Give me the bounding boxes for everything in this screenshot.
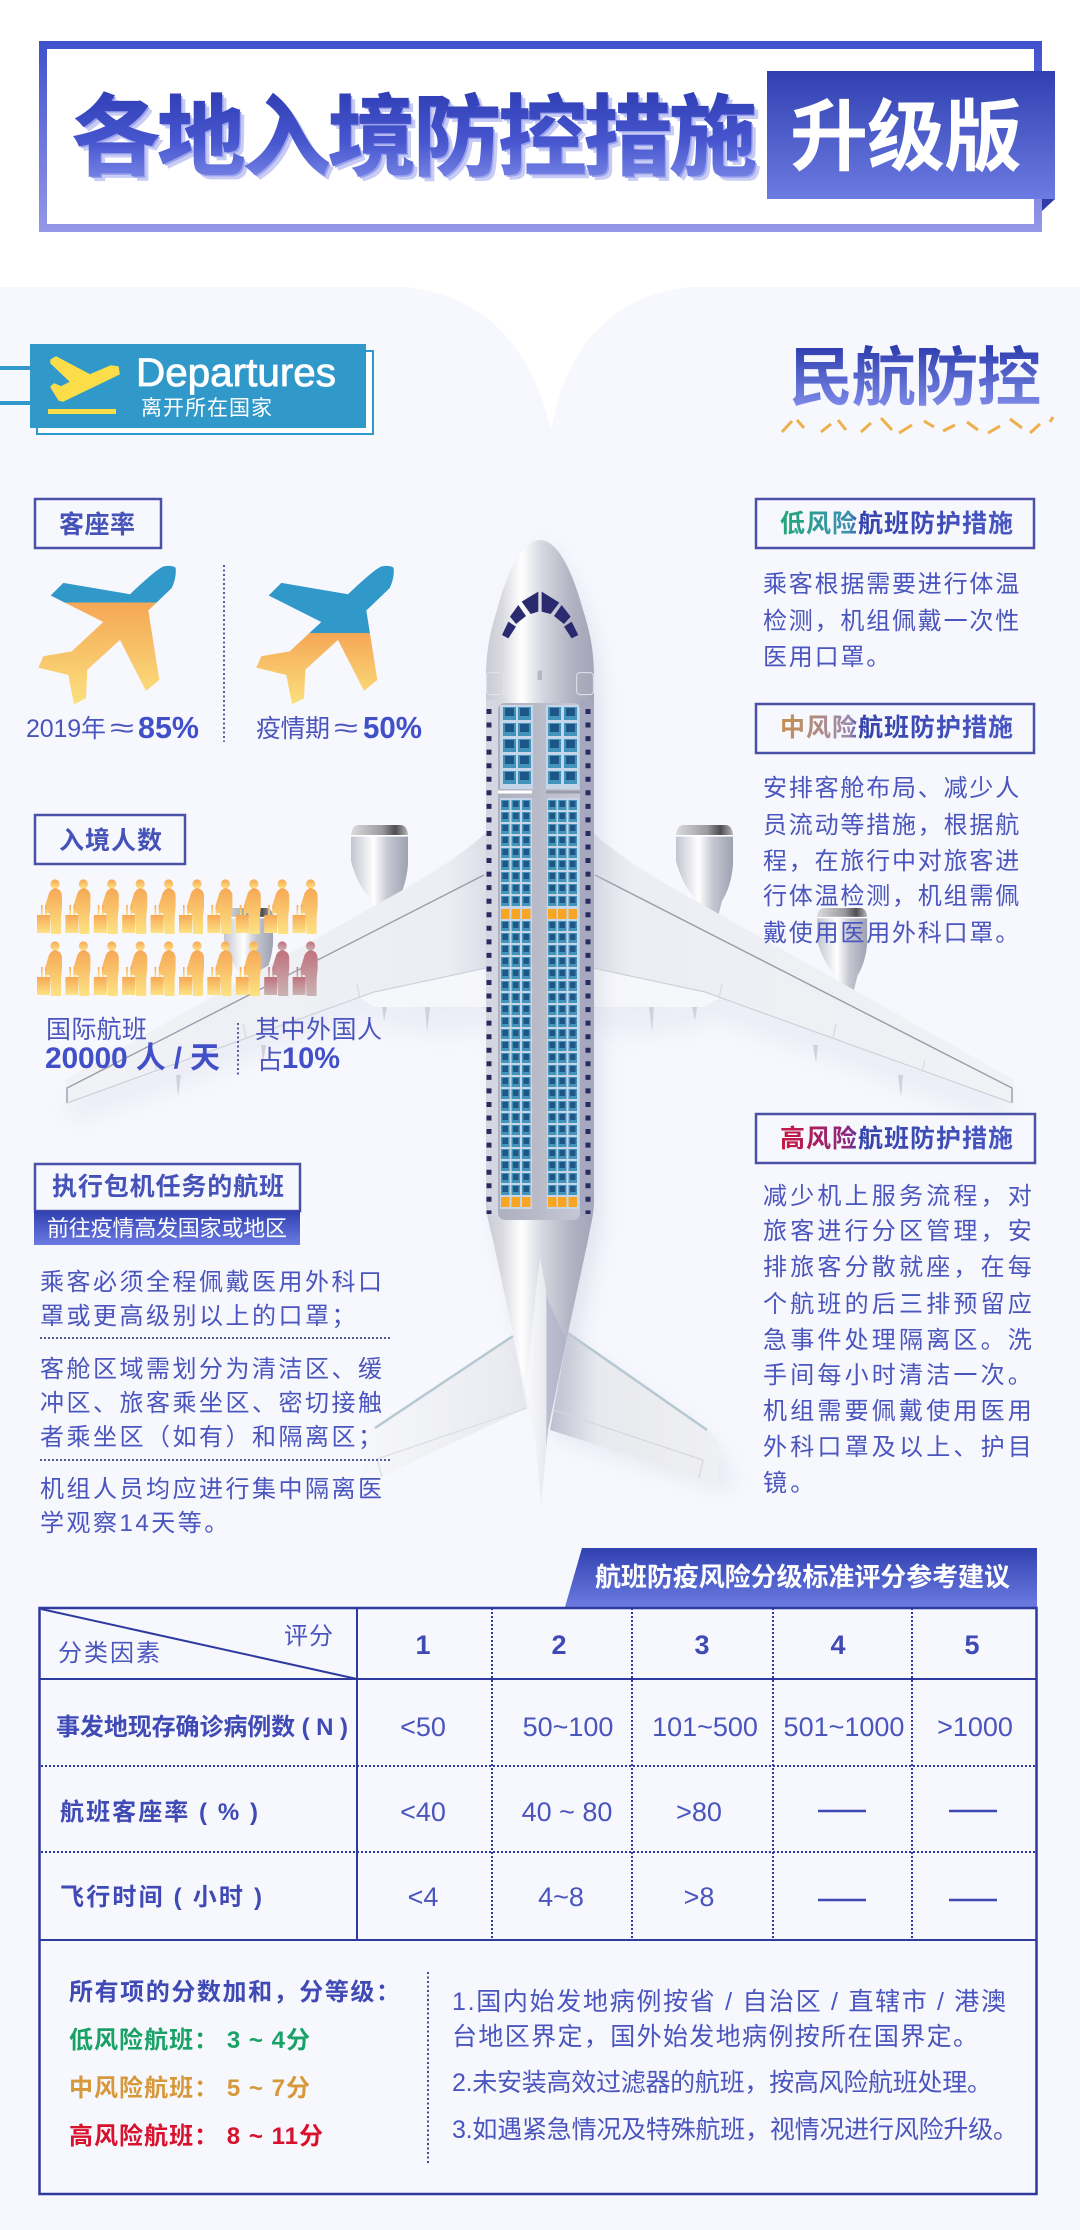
text: medium risk: 员流动等措施，根据航 [763,812,1021,839]
stat foreigners: 10% [282,1042,340,1075]
row: load factor [60,1797,997,1827]
text: high risk: 旅客进行分区管理，安 [763,1218,1035,1245]
main title: 各地入境防控措施 [77,93,762,192]
table header: 分类因素 [58,1640,160,1667]
text: high risk: 排旅客分散就座，在每 [763,1254,1035,1281]
subheading [34,1211,300,1245]
cockpit windows [487,592,593,695]
text: low risk: 乘客根据需要进行体温 [763,571,1021,598]
text: high risk [763,1183,1035,1497]
decorative zigzag [782,417,1053,433]
right wing [582,830,1014,1122]
row: flight time: <4 [408,1882,438,1912]
table header: 5 [964,1630,980,1660]
stat foreigners: 占 [257,1045,283,1075]
departures sign: Departures [136,351,336,395]
panel: medium risk measures: 中风险航班防护措施 [780,714,1013,742]
notes: 台地区界定，国外始发地病例按所在国界定。 [452,2023,978,2051]
icon: departing plane [48,357,119,414]
heading: 入境人数 [59,827,162,855]
stat foreigners [255,1016,382,1075]
notes: 3.如遇紧急情况及特殊航班，视情况进行风险升级。 [452,2116,1018,2144]
text: high risk: 个航班的后三排预留应 [763,1291,1035,1318]
panel: low risk measures: 低风险航班防护措施 [780,510,1013,538]
text: medium risk: 戴使用医用外科口罩。 [763,920,1021,947]
score levels legend: 低风险航班： 3 ~ 4分 [69,2027,310,2054]
text: cabin zones: 者乘坐区（如有）和隔离区； [40,1424,384,1451]
stat 2019: 2019年 [26,715,106,743]
text: high risk: 减少机上服务流程，对 [763,1183,1035,1210]
table ribbon heading: 航班防疫风险分级标准评分参考建议 [595,1562,1010,1592]
side strips [486,700,498,1216]
panel: inbound passengers [35,815,382,1075]
stat international flights: 国际航班 [46,1016,147,1044]
cabin windows [489,709,588,1214]
heading [35,815,185,864]
panel: seat load factor [26,499,422,745]
row: flight time: 4~8 [538,1882,584,1912]
row: flight time [60,1882,997,1912]
panel: high risk measures: 高风险航班防护措施 [780,1125,1013,1153]
departures sign [0,344,373,434]
heading [35,1164,300,1211]
stat pandemic: 疫情期 [256,715,330,743]
text: medium risk: 安排客舱布局、减少人 [763,775,1021,802]
pictogram: passengers [37,879,318,996]
table header: 3 [694,1630,710,1660]
table header: 评分 [284,1623,333,1650]
subheading: 前往疫情高发国家或地区 [47,1216,287,1241]
row: confirmed cases: 事发地现存确诊病例数 ( N ) [56,1714,348,1741]
text: masks [40,1269,384,1330]
row: flight time: >8 [684,1882,714,1912]
row: load factor: 航班客座率 ( % ) [60,1798,258,1826]
score levels legend: 所有项的分数加和，分等级： [69,1979,400,2006]
stat 2019: ≈ [110,713,134,743]
text: crew quarantine [40,1476,384,1537]
score levels legend [69,1979,400,2150]
stat pandemic: 50% [363,710,422,745]
fuselage [486,540,594,1503]
economy seats [501,800,577,1207]
text: medium risk [763,775,1021,947]
row: confirmed cases: >1000 [937,1712,1013,1742]
fuselage shadow [496,544,602,1404]
score levels legend: 高风险航班： 8 ~ 11分 [69,2123,323,2150]
stat foreigners: 其中外国人 [255,1016,382,1044]
first class seats [503,707,577,784]
row: load factor: <40 [400,1797,446,1827]
section title: civil aviation: 民航防控 [789,342,1041,414]
table ribbon heading [565,1548,1037,1607]
text: crew quarantine: 学观察14天等。 [40,1510,231,1537]
table header: 4 [830,1630,846,1660]
notes: 1.国内始发地病例按省 / 自治区 / 直辖市 / 港澳 [452,1988,1006,2016]
stat international flights [45,1016,220,1075]
row: confirmed cases: 501~1000 [784,1712,904,1742]
panel: charter flights [34,1164,392,1537]
text: high risk: 镜。 [763,1470,817,1497]
stat pandemic: ≈ [334,713,358,743]
text: low risk: 医用口罩。 [763,644,892,671]
notes [452,1988,1018,2144]
panel: high risk measures [756,1114,1035,1497]
text: low risk: 检测，机组佩戴一次性 [763,608,1021,635]
row: load factor: >80 [676,1797,722,1827]
divider [223,565,225,742]
text: crew quarantine: 机组人员均应进行集中隔离医 [40,1476,384,1503]
notes: 2.未安装高效过滤器的航班，按高风险航班处理。 [452,2069,992,2097]
text: medium risk: 行体温检测，机组需佩 [763,883,1021,910]
title banner [39,41,1055,232]
main title: 各地入境防控措施 [72,88,757,187]
text: cabin zones: 冲区、旅客乘坐区、密切接触 [40,1390,384,1417]
text: low risk [763,571,1021,671]
tail planes [360,1333,735,1490]
row: confirmed cases: <50 [400,1712,446,1742]
main title: 各地入境防控措施 [74,90,759,189]
row: load factor: 40 ~ 80 [522,1797,612,1827]
cabin floor [498,703,580,1220]
table header: 1 [415,1630,431,1660]
table header: 2 [551,1630,567,1660]
left wing [65,830,497,1122]
heading: 执行包机任务的航班 [52,1173,284,1201]
text: cabin zones: 客舱区域需划分为清洁区、缓 [40,1356,384,1383]
text: high risk: 手间每小时清洁一次。 [763,1362,1035,1389]
aircraft illustration [65,540,1014,1503]
score levels legend: 中风险航班： 5 ~ 7分 [69,2075,310,2102]
text: medium risk: 程，在旅行中对旅客进 [763,848,1021,875]
text: masks: 罩或更高级别以上的口罩； [40,1303,358,1330]
vertical fin [526,1258,566,1503]
departures sign: 离开所在国家 [141,397,272,420]
title frame [39,41,1042,232]
stat international flights: 20000 人 / 天 [45,1042,220,1075]
upgrade badge [767,71,1055,211]
icon: plane 85% [38,566,176,704]
stat 2019 [26,710,199,745]
text: high risk: 外科口罩及以上、护目 [763,1434,1035,1461]
row: confirmed cases: 101~500 [652,1712,758,1742]
divider [427,1972,429,2164]
icon: plane 50% [256,566,394,704]
text: cabin zones [40,1356,384,1451]
stat pandemic [256,710,422,745]
text: high risk: 急事件处理隔离区。洗 [763,1327,1035,1354]
panel: medium risk measures [756,704,1034,947]
engines behind wings [224,825,867,990]
row: confirmed cases: 50~100 [523,1712,613,1742]
table grid [39,1608,1037,2194]
text: high risk: 机组需要佩戴使用医用 [763,1398,1035,1425]
divider [237,1023,239,1075]
text: masks: 乘客必须全程佩戴医用外科口 [40,1269,384,1296]
row: flight time: 飞行时间 ( 小时 ) [60,1884,262,1911]
table header [58,1623,980,1667]
risk scoring table [39,1608,1037,2194]
upgrade badge: 升级版 [790,93,1022,181]
cabin dividers [498,790,532,794]
seat backing [500,705,579,1209]
stat 2019: 85% [138,710,199,745]
panel: low risk measures [756,499,1034,671]
heading [35,499,161,548]
heading: 客座率 [59,510,135,539]
row: confirmed cases [56,1712,1013,1742]
